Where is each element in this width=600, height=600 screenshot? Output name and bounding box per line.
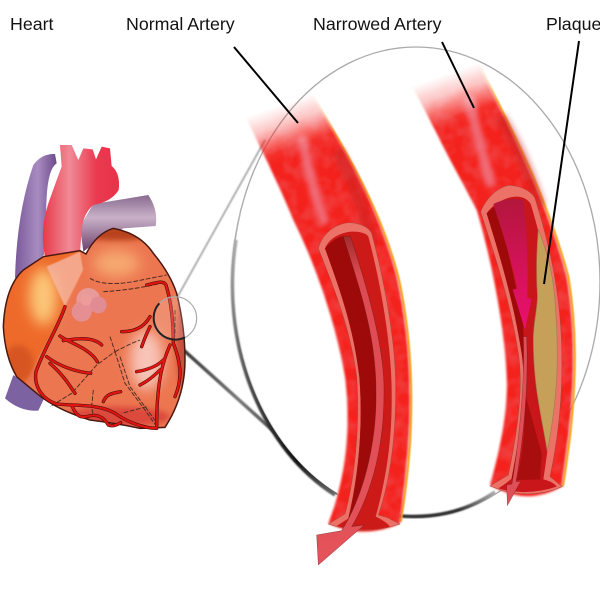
pulmonary artery [80,195,156,252]
outer yellow rim [308,88,411,522]
small magnifier circle [153,297,197,340]
upper ventricle top shade [94,229,142,244]
right edge shade [174,305,184,386]
magnified view circle [232,47,600,517]
lumen dark side [487,205,525,478]
coronary arteries, red [36,282,180,428]
label: heart: Heart [10,14,54,34]
vessel wall [240,85,410,532]
restricted blood flow arrow, upper [493,199,532,330]
label: narrowed artery: Narrowed Artery [313,14,442,34]
outer yellow rim [475,57,575,487]
heart shading [0,226,191,427]
heart outline [3,228,185,428]
plaque [533,229,557,452]
label: plaque: Plaque [546,14,600,34]
narrowed artery [407,53,575,506]
pointer: normal artery [234,47,298,123]
restricted blood flow arrow, lower [507,337,527,506]
lumen dark side [325,236,376,518]
outer wall with top fade [240,85,411,532]
wall shading [468,97,540,207]
pointer: narrowed artery [442,42,474,108]
outer wall with top fade [407,53,575,496]
cut wall edge [318,223,400,530]
pointer lines [234,41,579,284]
apex shade [63,407,170,427]
blood flow arrow [317,237,384,565]
wall shading [302,137,373,247]
pointer: plaque [544,41,579,284]
heart body [3,228,185,428]
lumen [325,232,392,530]
inferior vena cava [5,375,45,411]
atrium highlight [29,268,57,325]
lower ventricle highlight [130,330,163,390]
pulmonary valve blob [72,288,107,322]
cut wall edge [481,185,562,494]
superior vena cava [15,154,57,278]
aorta [43,145,119,257]
atrium lower shade [3,345,33,382]
coronary arteries, dark outline [36,282,180,428]
label: normal artery: Normal Artery [126,14,235,34]
lumen [487,197,557,492]
aortic root overlay [47,252,83,307]
lumen lower shade [517,393,542,480]
magnifier connector lines [178,140,300,455]
dashed rear vessels [50,275,175,427]
normal artery [240,85,411,565]
upper ventricle highlight [93,250,140,277]
heart illustration [0,145,197,428]
right atrium base [0,250,84,383]
vessel wall [407,53,573,496]
